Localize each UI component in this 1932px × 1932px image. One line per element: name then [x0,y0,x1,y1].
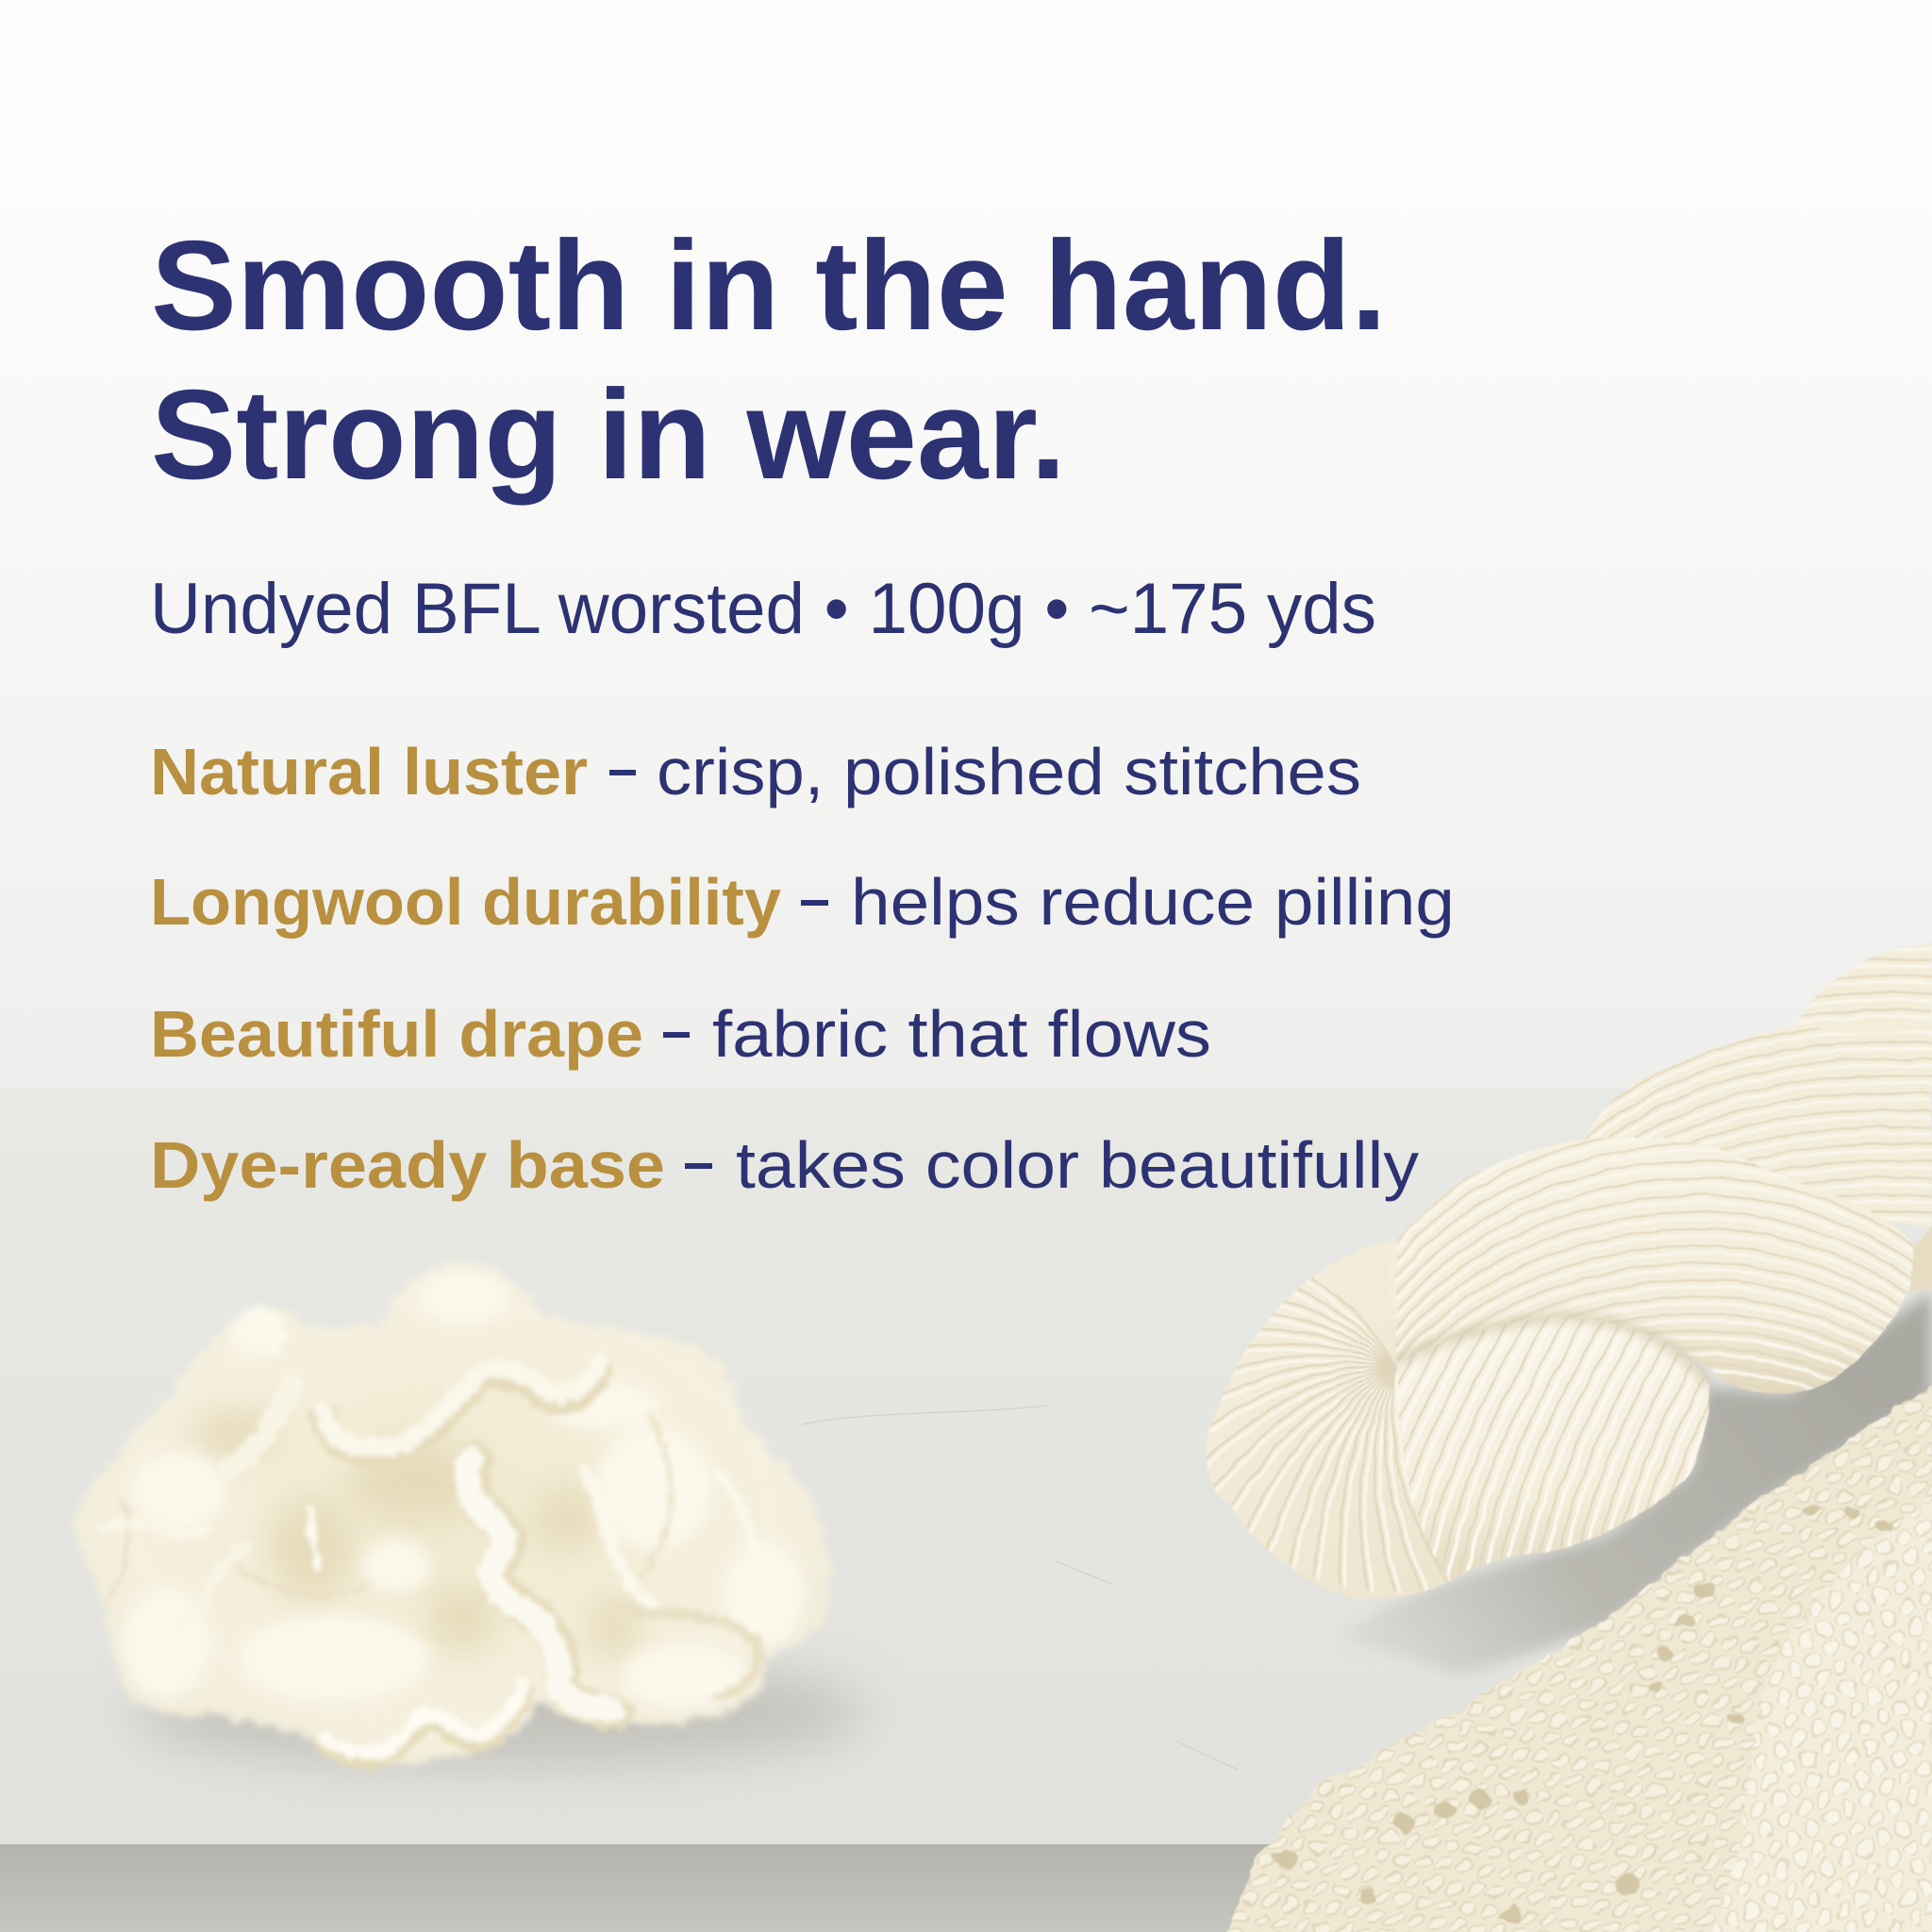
table surface cracks [802,1406,1238,1770]
benefit list [150,735,1455,1202]
skein end tail [1910,1226,1932,1292]
fleece highlights [123,1271,804,1708]
fleece shadow [132,1660,868,1764]
skein upper strand [1583,1024,1932,1226]
title: Strong in wear. [151,363,1066,506]
raw wool fleece pile [75,1263,831,1764]
table front edge [0,1844,1932,1932]
table top [0,1089,1932,1844]
yarn skein [1171,941,1932,1613]
benefit: dye-ready base: Dye-ready base [150,1128,665,1202]
subtitle: Undyed BFL worsted • 100g • ~175 yds [150,569,1376,649]
skein front lobe [1398,1317,1709,1581]
skein middle strand [1394,1138,1914,1394]
benefit: natural luster: Natural luster [150,735,588,808]
benefit: longwool durability: Longwool durability [150,865,781,939]
benefit: beautiful drape: Beautiful drape [150,997,643,1071]
benefit: dye-ready base [150,1128,1419,1202]
benefit: longwool durability [150,865,1455,939]
skein left hank [1206,1241,1451,1599]
benefit: natural luster: crisp, polished stitches [657,735,1361,808]
benefit: longwool durability: helps reduce pilling [851,865,1455,939]
fleece curly locks [104,1315,783,1758]
skein crease shadow [1398,1317,1709,1387]
benefit: natural luster [150,735,1361,808]
benefit: beautiful drape [150,997,1211,1071]
title: Smooth in the hand. [151,214,1387,357]
knitted swatch [1224,1387,1932,1932]
knit lace eyelets [1274,1504,1893,1923]
skein top strand [1798,943,1932,1033]
benefit: dye-ready base: takes color beautifully [736,1128,1419,1202]
wall background [0,0,1932,1089]
title [151,214,1387,506]
fleece warm shadows [189,1409,638,1661]
shaded gap behind skein [1340,1291,1932,1674]
knit fold [1707,1500,1932,1932]
benefit: beautiful drape: fabric that flows [712,997,1211,1071]
